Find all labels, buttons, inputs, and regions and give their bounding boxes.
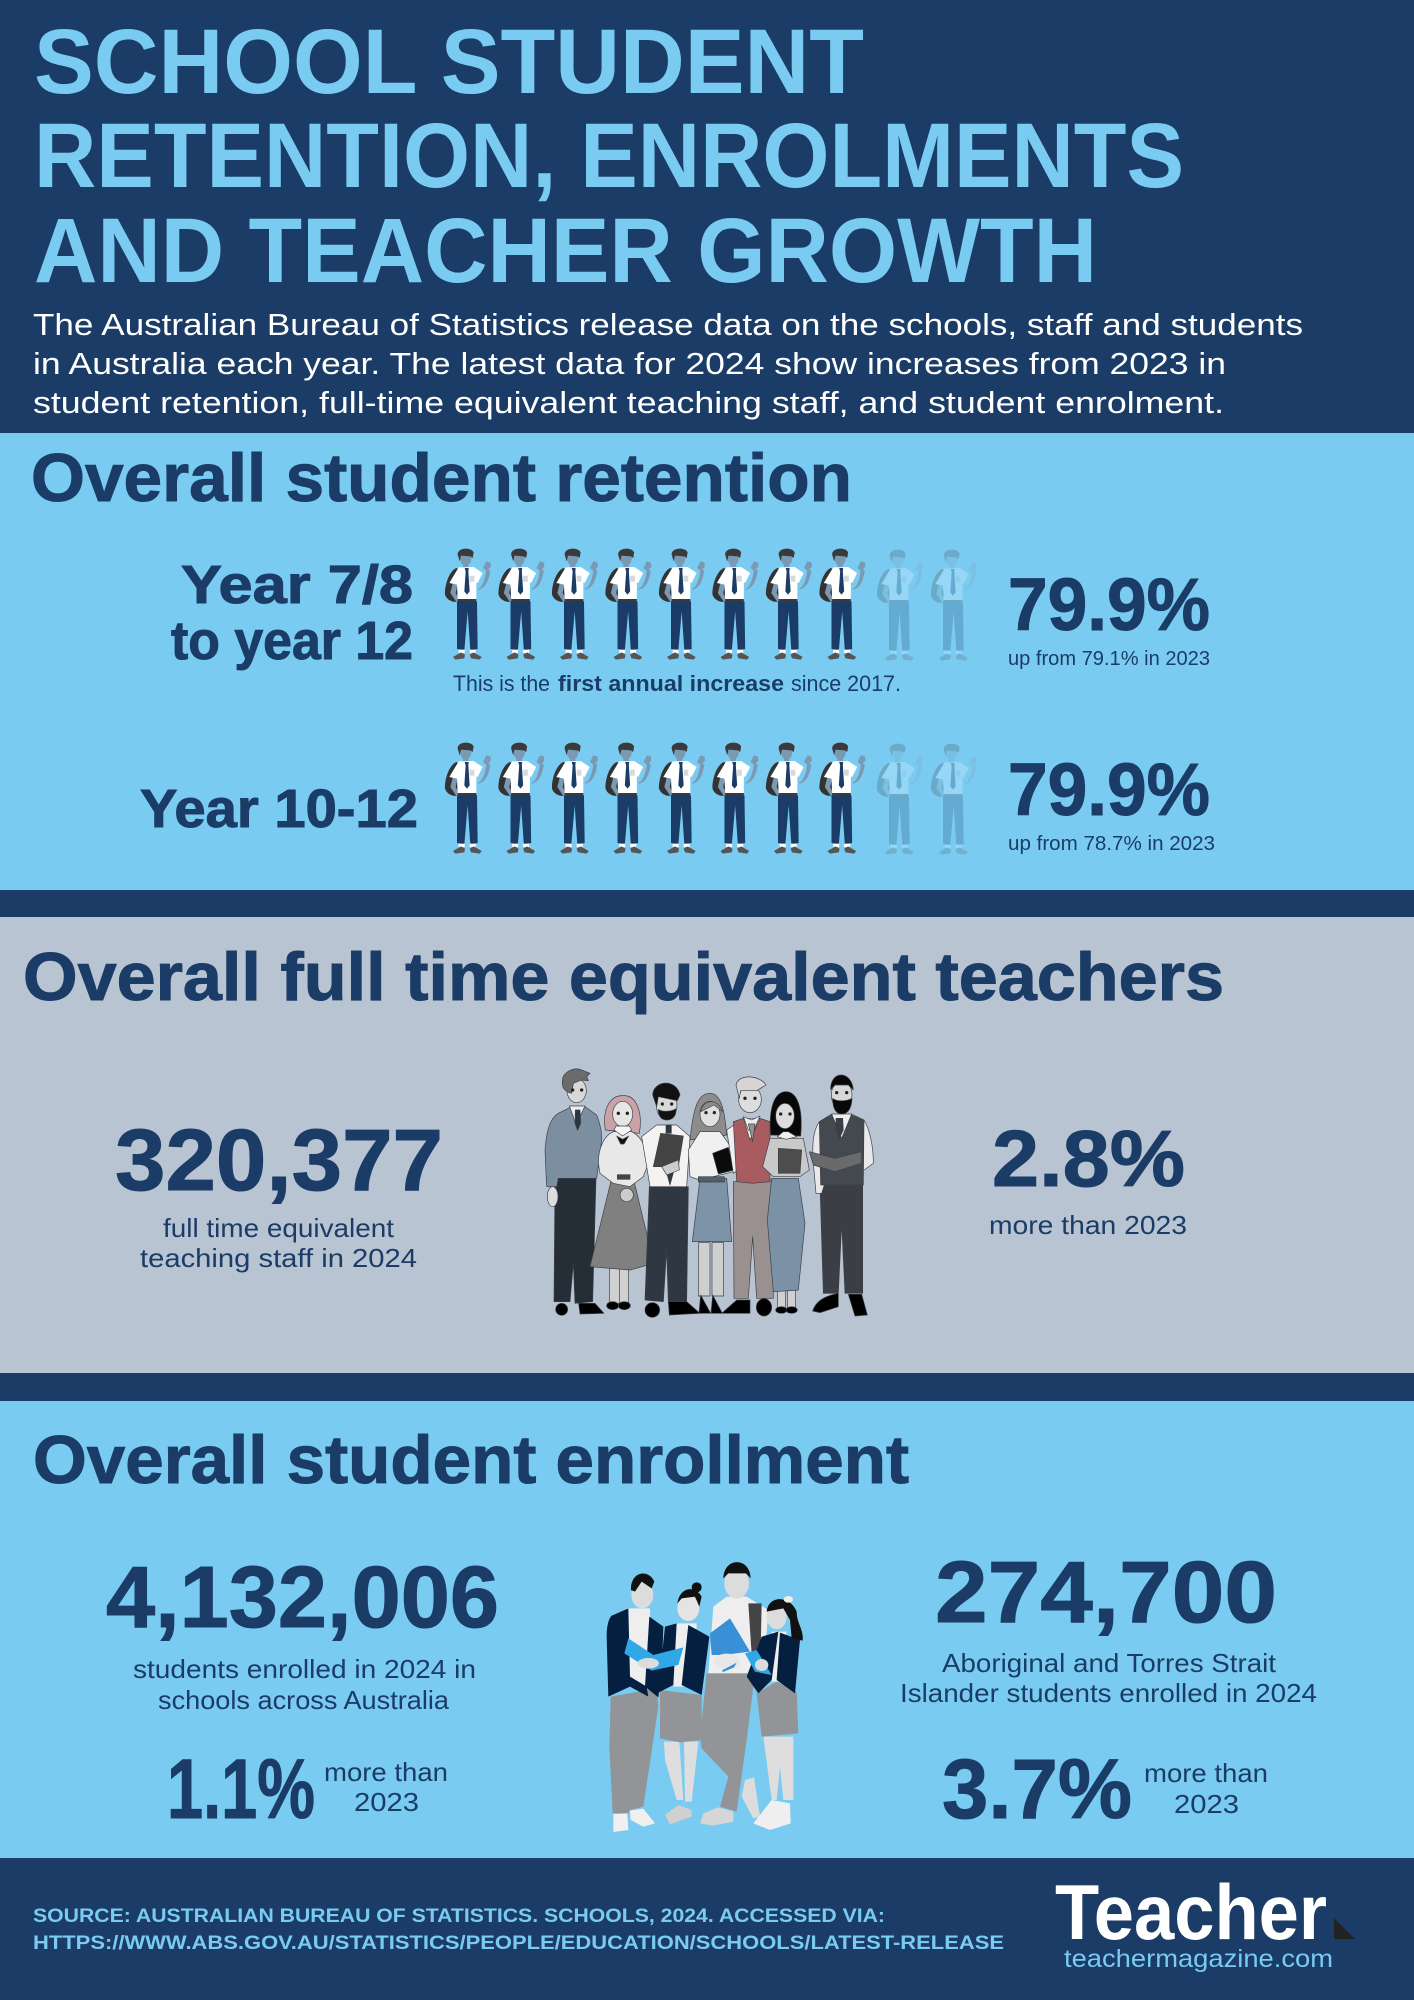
divider band (0, 1373, 1414, 1401)
stat: 4,132,006 students: schools across Australia (158, 1685, 450, 1715)
stat: 4,132,006 students: 4,132,006 (106, 1549, 499, 1646)
stat: 1.1% more (167, 1742, 448, 1836)
book 1 (624, 1638, 683, 1671)
divider band (0, 890, 1414, 917)
footer background (0, 1858, 1414, 2000)
t7 (820, 1185, 863, 1293)
stat: 1.1% more: more than (324, 1757, 448, 1787)
stat: 320,377 teachers: teaching staff in 2024 (140, 1243, 417, 1273)
pictogram: students row 1 (445, 549, 977, 661)
stat: 1.1% more: 2023 (354, 1787, 419, 1817)
s3 (708, 1597, 768, 1673)
heading: overall student retention: Overall student retention (31, 440, 852, 516)
t3 (645, 1187, 688, 1302)
stat: 4,132,006 students (106, 1549, 499, 1715)
stat: 1.1% more: 1.1% (167, 1742, 315, 1836)
heading: full time equivalent teachers: Overall full time equivalent teachers (23, 939, 1224, 1015)
stat: 274,700 Aboriginal and Torres Strait Islander students: Islander students enrolled in 2024 (900, 1678, 1317, 1708)
title: SCHOOL STUDENT (34, 11, 864, 113)
stat: 320,377 teachers (115, 1112, 443, 1273)
title: AND TEACHER GROWTH (34, 200, 1097, 302)
stat: 2.8% more: more than 2023 (989, 1210, 1187, 1240)
illustration: group of teachers (545, 1069, 873, 1317)
stat: 3.7% more: more than (1144, 1758, 1268, 1788)
stat: 79.9% year 7/8 to 12: 79.9% (1008, 563, 1210, 646)
logo: Teacher magazine: teachermagazine.com (1064, 1945, 1333, 1973)
stat: 274,700 Aboriginal and Torres Strait Islander students (900, 1544, 1317, 1708)
intro text: The Australian Bureau of Statistics release data on the schools, staff and students (33, 307, 1303, 342)
title: RETENTION, ENROLMENTS (34, 105, 1184, 207)
source text: HTTPS://WWW.ABS.GOV.AU/STATISTICS/PEOPLE/EDUCATION/SCHOOLS/LATEST-RELEASE (33, 1933, 1004, 1954)
label: year 10-12: Year 10-12 (140, 779, 418, 839)
pictogram: students row 2 (445, 743, 977, 855)
s4 (763, 1737, 793, 1800)
stat: 3.7% more: 2023 (1174, 1789, 1239, 1819)
title (34, 11, 1184, 302)
label: year 7/8 to year 12: to year 12 (171, 611, 413, 671)
illustration: group of students (607, 1562, 803, 1832)
stat: 2.8% more: 2.8% (992, 1114, 1185, 1203)
logo: Teacher magazine: Teacher (1055, 1868, 1327, 1956)
intro text: in Australia each year. The latest data for 2024 show increases from 2023 in (33, 346, 1226, 381)
stat: 79.9% year 10-12: up from 78.7% in 2023 (1008, 833, 1215, 855)
t1 (554, 1178, 596, 1303)
s1 (609, 1688, 658, 1813)
panel: full time equivalent teachers (0, 917, 1414, 1373)
s3 raised foot (742, 1777, 760, 1818)
stat: 3.7% more: 3.7% (942, 1742, 1132, 1836)
stat: 274,700 Aboriginal and Torres Strait Islander students: 274,700 (935, 1544, 1277, 1641)
t2 (605, 1096, 640, 1133)
header background (0, 0, 1414, 433)
source text: SOURCE: AUSTRALIAN BUREAU OF STATISTICS. SCHOOLS, 2024. ACCESSED VIA: (33, 1906, 885, 1927)
stat: 79.9% year 7/8 to 12: up from 79.1% in 2023 (1008, 648, 1210, 670)
stat: 4,132,006 students: students enrolled in 2024 in (133, 1654, 476, 1684)
t6 (770, 1092, 801, 1136)
t4 (690, 1093, 727, 1140)
t5 (733, 1180, 773, 1298)
s2 (664, 1742, 683, 1800)
stat: 320,377 teachers: full time equivalent (163, 1213, 395, 1243)
panel: overall student retention (0, 433, 1414, 890)
label: year 7/8 to year 12 (171, 555, 413, 671)
stat: 79.9% year 10-12: 79.9% (1008, 748, 1210, 831)
intro text: student retention, full-time equivalent teaching staff, and student enrolment. (33, 385, 1224, 420)
faces: eyes (571, 1088, 848, 1116)
stat: 320,377 teachers: 320,377 (115, 1112, 443, 1209)
note: first annual increase: since 2017. (791, 671, 901, 696)
label: year 7/8 to year 12: Year 7/8 (181, 555, 413, 615)
intro text (33, 307, 1303, 420)
stat: 3.7% more (942, 1742, 1268, 1836)
stat: 274,700 Aboriginal and Torres Strait Islander students: Aboriginal and Torres Strait (942, 1648, 1277, 1678)
note: first annual increase (453, 671, 901, 696)
panel: overall student enrollment (0, 1401, 1414, 1858)
note: first annual increase: first annual increase (558, 671, 784, 696)
heading: overall student enrollment: Overall student enrollment (33, 1422, 909, 1498)
stat: 2.8% more (989, 1114, 1187, 1240)
source text (33, 1906, 1004, 1954)
note: first annual increase: This is the (453, 671, 550, 696)
